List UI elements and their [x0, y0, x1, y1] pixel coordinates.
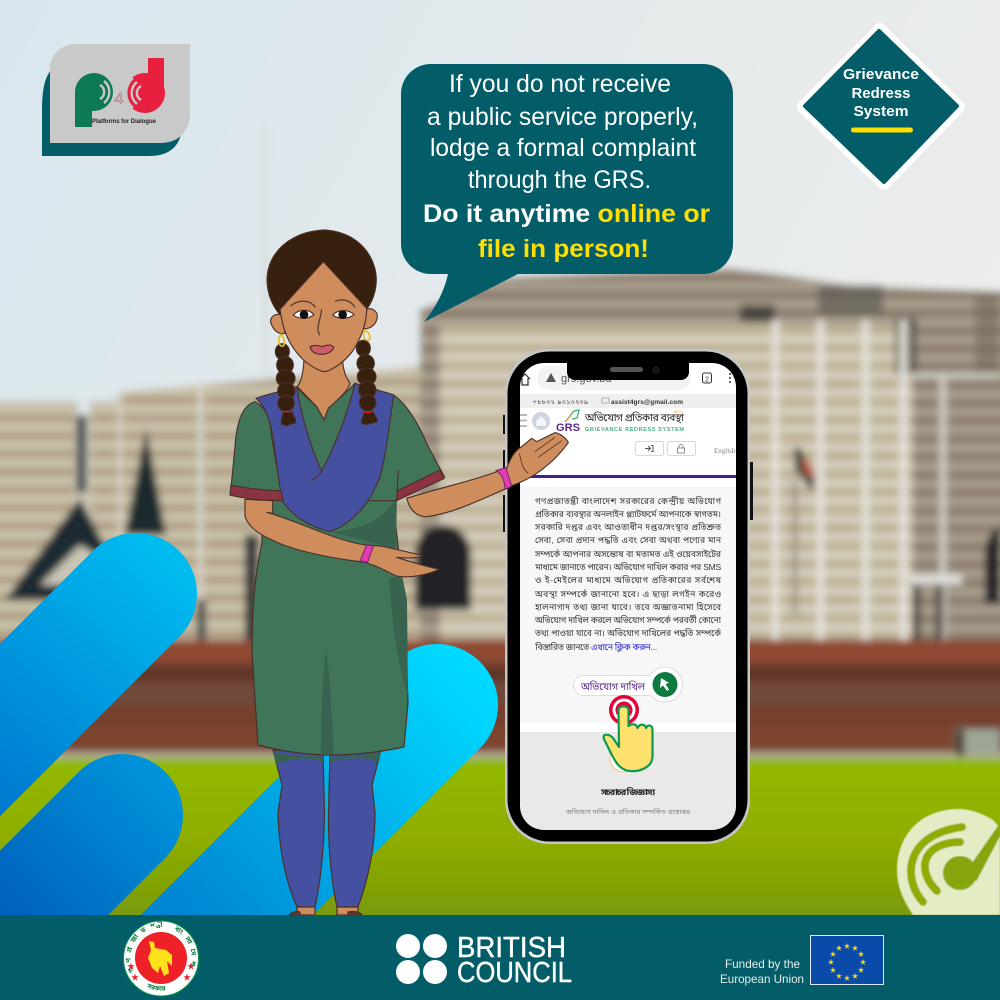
kameez folds [273, 495, 408, 765]
upper figure group [230, 230, 568, 577]
kameez body [252, 460, 408, 755]
EU flag: ★ [844, 943, 851, 950]
introduction paragraph: মাধ্যমে জানাতে পারেন। অভিযোগ দাখিল করার পর SMS [534, 562, 722, 572]
EU flag: ★ [844, 975, 851, 982]
EU flag: ★ [830, 951, 837, 958]
bubble message text: file in person! [478, 235, 649, 263]
right arm and hand [407, 433, 568, 517]
bubble message text: lodge a formal complaint [430, 134, 696, 162]
FAQ section: অভিযোগ দাখিল ও প্রতিকার সম্পর্কিত প্রশ্নোত্তর [565, 808, 690, 816]
emblem: Government of Bangladesh: ★ [187, 962, 195, 971]
complaint button: অভিযোগ দাখিল [580, 681, 646, 693]
introduction paragraph: ও ই-মেইলের মাধ্যমে অভিযোগ প্রতিকারের সর্বশেষ [535, 575, 722, 585]
emblem: Government of Bangladesh: গণপ্রজাতন্ত্রী বাংলাদেশ [126, 920, 196, 973]
funded by text: European Union [720, 972, 804, 986]
sleeve right [367, 395, 444, 501]
badge: Grievance Redress System: System [854, 104, 908, 120]
GRS site header: BETA [674, 410, 684, 414]
badge: Grievance Redress System: Redress [852, 86, 910, 102]
character: woman presenting the phone [230, 230, 568, 915]
emblem: Government of Bangladesh: ★ [183, 973, 191, 982]
introduction paragraph: সরকারি দপ্তর এবং আওতাধীন দপ্তর/সংস্থার প্রতিশ্রুত [534, 522, 722, 532]
badge: Grievance Redress System [803, 29, 959, 184]
GRS site header: GRS [556, 422, 580, 434]
browser bar: grs.gov.bd [561, 373, 612, 385]
logo: British Council: COUNCIL [457, 957, 572, 989]
hair back [267, 230, 376, 314]
emblem: Government of Bangladesh: ★ [131, 973, 139, 982]
introduction paragraph: বিস্তারিত জানতে এখানে ক্লিক করুন... [534, 642, 657, 652]
phone screen [520, 363, 736, 830]
page content background [520, 487, 736, 723]
EU flag: ★ [828, 959, 835, 966]
left braid [275, 344, 296, 426]
neck [297, 360, 350, 420]
introduction paragraph: সম্পর্কে আপনার অসন্তোষ বা মতামত এই ওয়েবসাইটের [534, 549, 722, 559]
emblem: Government of Bangladesh [123, 920, 199, 996]
icon: tap target rings [609, 695, 639, 725]
badge: Grievance Redress System: Grievance [843, 67, 919, 83]
bubble message text: Do it anytime online or [423, 200, 710, 228]
EU flag [810, 936, 884, 984]
ears [271, 309, 377, 334]
EU flag: ★ [830, 967, 837, 974]
bubble message text: If you do not receive [449, 70, 671, 98]
emblem: Government of Bangladesh: সরকার [148, 984, 166, 991]
earrings [279, 330, 370, 346]
EU flag: ★ [858, 967, 865, 974]
browser bar [520, 366, 731, 390]
funded by text: Funded by the [725, 957, 800, 971]
browser bar: 2 [705, 376, 709, 384]
bubble message text [423, 70, 710, 263]
phone mockup [503, 349, 753, 844]
left arm and hand [245, 499, 439, 577]
neckline panel [297, 383, 355, 487]
eyes [293, 310, 354, 319]
left bangle [360, 545, 373, 562]
contact strip: +৮৮০২ ৯০১০২০৯ [533, 399, 588, 406]
face [280, 262, 367, 372]
right braid [356, 340, 377, 425]
EU flag: ★ [860, 959, 867, 966]
introduction paragraph: অবস্থা সম্পর্কে জানানো হবে। এ ছাড়া লগইন করেও [534, 589, 721, 599]
EU flag: ★ [836, 945, 843, 952]
GRS site header: English [714, 447, 736, 455]
GRS site header: GRIEVANCE REDRESS SYSTEM [585, 427, 684, 433]
EU flag: ★ [852, 945, 859, 952]
white band [520, 723, 736, 732]
sleeve seam [397, 470, 398, 501]
speech bubble [401, 64, 733, 322]
decorative blue pills [0, 594, 437, 1000]
complaint button [574, 667, 682, 702]
contact strip: assist4grs@gmail.com [611, 399, 683, 406]
FAQ section [566, 754, 690, 814]
introduction paragraph: তথ্য পাওয়া যাবে না। অভিযোগ দাখিলের পদ্ধতি সম্পর্কে [534, 628, 721, 638]
EU flag: ★ [852, 973, 859, 980]
icon: tapping hand [604, 706, 652, 771]
logo: P4D Platforms for Dialogue [42, 44, 190, 156]
logo: British Council [396, 932, 572, 989]
introduction paragraph: প্রতিকার ব্যবস্থার অনলাইন প্ল্যাটফর্মে আপনাকে স্বাগতম। [535, 509, 721, 519]
finger creases [519, 437, 562, 473]
introduction paragraph [534, 496, 722, 652]
contact strip [520, 394, 736, 408]
GRS site header: অভিযোগ প্রতিকার ব্যবস্থা [584, 411, 684, 424]
corner logo mark [897, 809, 1000, 915]
right bangle [496, 468, 512, 489]
sleeve left [230, 402, 283, 501]
funded by text [720, 957, 804, 986]
introduction paragraph: গণপ্রজাতন্ত্রী বাংলাদেশ সরকারের কেন্দ্রীয় অভিযোগ [535, 496, 722, 506]
introduction paragraph: অভিযোগ দাখিল করলে অভিযোগ সম্পর্কে পরবর্তী কোনো [534, 615, 722, 625]
EU flag: ★ [858, 951, 865, 958]
EU flag: ★ [836, 973, 843, 980]
footer band [0, 915, 1000, 1000]
sleeve cuffs [230, 485, 283, 501]
introduction paragraph: সেবা, সেবা প্রদান পদ্ধতি এবং সেবা অথবা পণ্যের মান [535, 535, 722, 545]
phone notch [567, 363, 689, 380]
mouth [310, 345, 334, 354]
dupatta [256, 383, 394, 532]
GRS site header [520, 410, 736, 478]
bubble message text: through the GRS. [468, 166, 651, 194]
feet [289, 907, 362, 915]
emblem: Government of Bangladesh: ★ [127, 962, 135, 971]
introduction paragraph: হালনাগাদ তথ্য জানা যাবে। তবে অজ্ঞাতনামা হিসেবে [534, 602, 722, 612]
bubble message text: a public service properly, [427, 103, 698, 131]
logo: P4D Platforms for Dialogue: Platforms for Dialogue [92, 118, 156, 125]
logo: P4D Platforms for Dialogue: 4 [114, 89, 124, 108]
FAQ section: সচরাচর জিজ্ঞাস্য [600, 786, 655, 797]
logo: British Council: BRITISH [457, 932, 566, 964]
trousers [273, 750, 381, 907]
phone side buttons [503, 415, 753, 532]
brows and nose [291, 300, 355, 335]
